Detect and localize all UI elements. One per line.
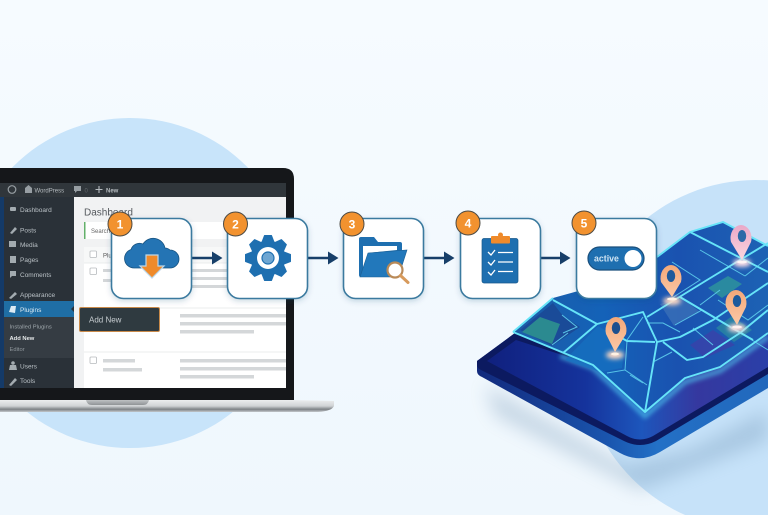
icon: folder with magnifier [359,237,408,282]
menu labels: Users [20,364,38,370]
map colour blocks [520,276,752,372]
laptop base [0,400,334,412]
laptop notch [86,400,149,405]
plugin table: Plugin [103,254,120,260]
badge 4: 4 [465,216,472,230]
icon: cloud download [125,238,179,278]
arrow: step 1 to 2 [192,252,222,264]
badge 2: 2 [232,218,239,232]
pin: right [726,290,746,332]
admin sidebar [0,183,74,388]
menu labels: Plugins [20,307,42,314]
tablet with map [477,222,768,490]
menu labels: Appearance [20,292,55,299]
plugin table [84,247,286,388]
circle: left backdrop [0,118,295,448]
menu labels: Pages [20,257,39,264]
badge 1: 1 [117,218,124,232]
menu labels: Tools [20,378,36,385]
icon: gear [246,236,290,280]
arrow: step 2 to 3 [308,252,338,264]
step 1: download card [108,212,192,298]
map streets [552,250,768,385]
menu labels: Media [20,242,38,249]
menu labels: Posts [20,228,37,234]
circle: right backdrop [581,180,768,515]
crease glow [560,337,768,416]
content area [74,197,286,388]
admin bar [0,183,286,197]
tablet top surface [487,333,768,440]
plugins menu highlight [4,301,74,317]
badge 5: 5 [581,216,588,230]
menu labels: Installed Plugins [10,324,52,330]
arrow: step 4 to 5 [540,252,570,264]
pin: centre [660,265,681,305]
admin bar: WordPress [34,188,64,194]
tablet dark rim [477,300,768,445]
pin: lower left [606,317,626,359]
dashboard heading: Dashboard [84,208,133,218]
menu labels: Comments [20,272,52,279]
step 5: active toggle card [572,211,656,298]
menu labels: Add New [10,336,35,342]
menu labels [10,207,55,385]
menu icons [9,207,17,386]
step 3: folder card [340,212,424,298]
arrow: step 3 to 4 [424,252,454,264]
admin bar: 0 [84,188,88,194]
menu labels: Editor [10,347,25,353]
map surface [513,222,768,412]
badge 3: 3 [349,218,356,232]
tablet shadow [485,385,768,490]
plugins submenu [4,317,74,358]
add new popup [80,308,160,332]
laptop bezel [0,168,294,400]
step 2: settings card [224,212,308,298]
menu labels: Dashboard [20,207,52,214]
admin bar: New [106,188,119,194]
map main roads [513,222,768,412]
pin: top [730,225,751,267]
search notice box: Search [91,229,110,235]
tablet body edge [477,300,768,458]
laptop [0,168,334,412]
search notice box [84,222,286,239]
step 4: checklist card [456,211,540,298]
icon: toggle: active [594,254,619,264]
icon: clipboard [482,232,518,283]
add new popup: Add New [89,316,122,324]
